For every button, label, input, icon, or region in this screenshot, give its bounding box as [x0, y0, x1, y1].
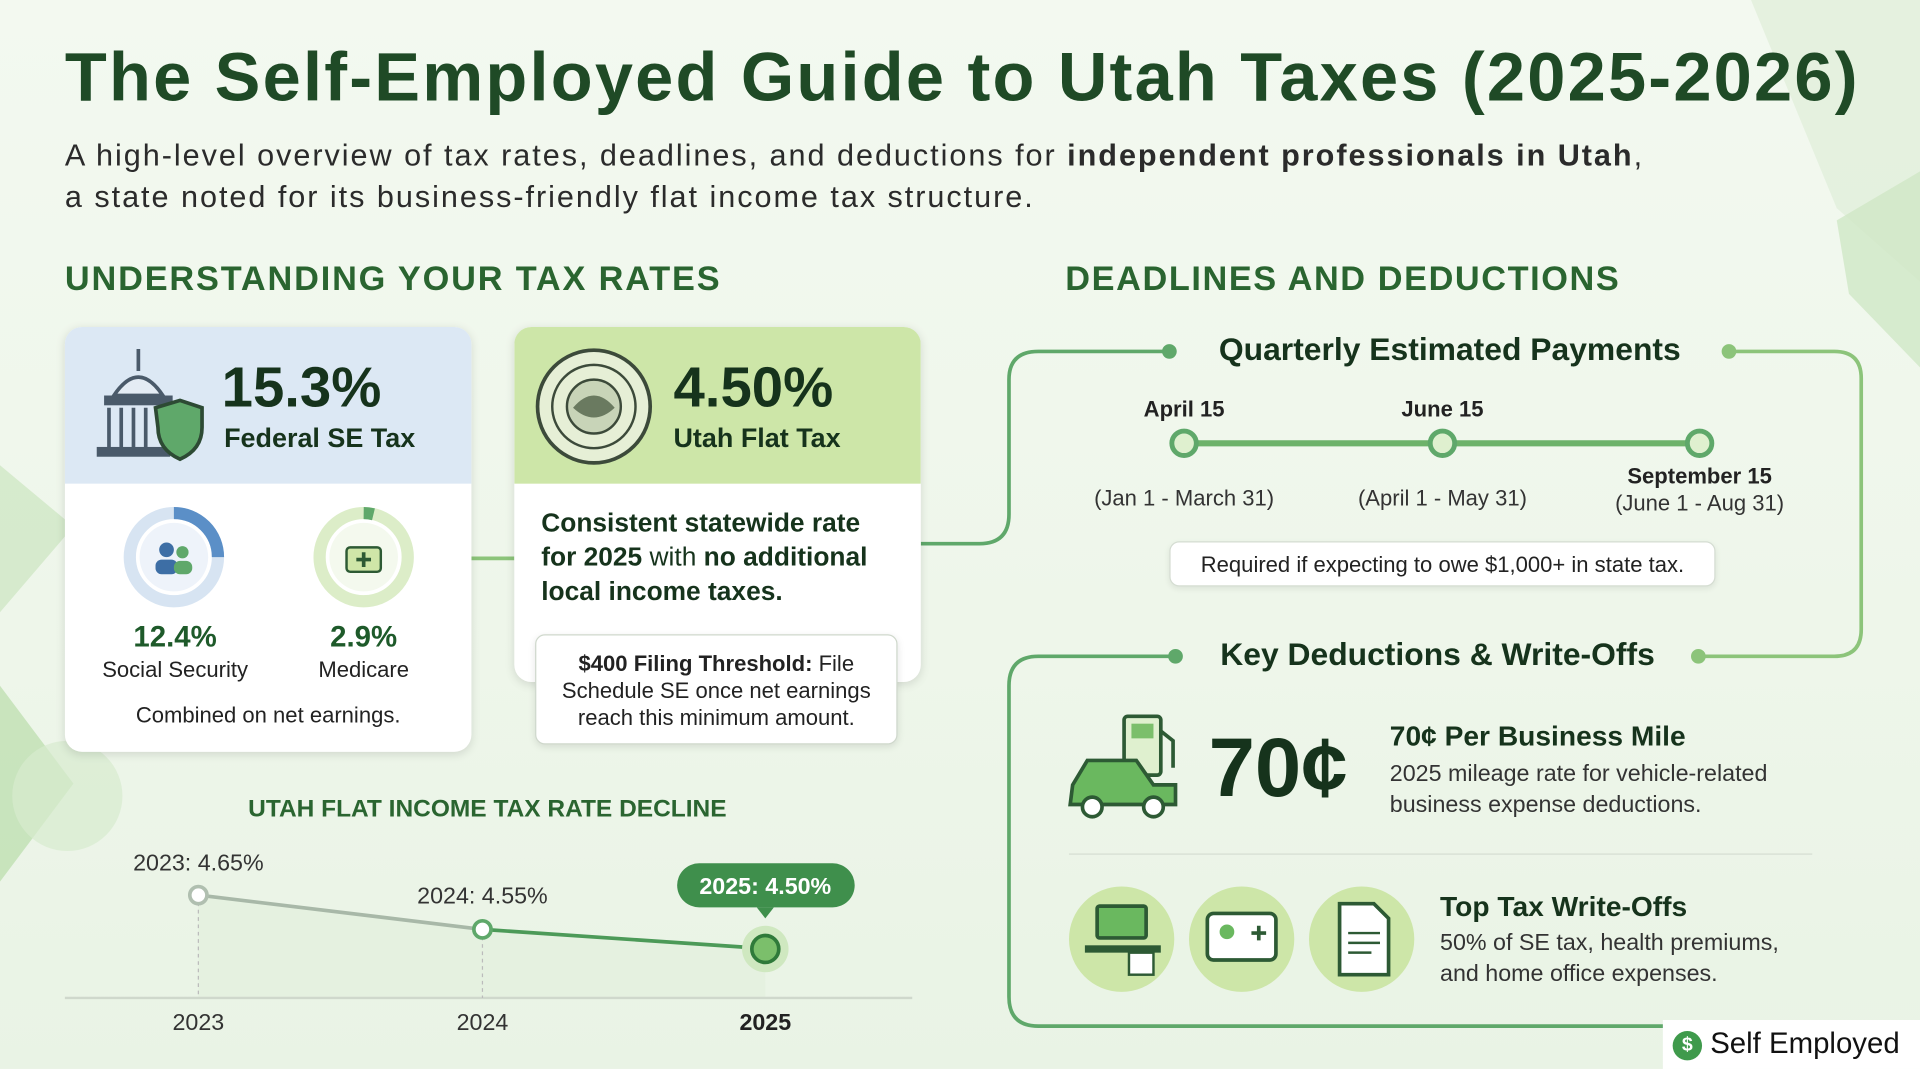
donut: social security: [124, 507, 224, 608]
logo: Self Employed: [1710, 1027, 1900, 1060]
line chart: [65, 850, 912, 1035]
timeline: (Jan 1 - March 31): [1094, 486, 1274, 511]
note: requirement: Required if expecting to owe $1,000+ in state tax.: [1201, 552, 1684, 577]
timeline: September 15: [1627, 464, 1772, 489]
panel: federal SE tax: Medicare: [318, 658, 409, 682]
callout: filing threshold: $400 Filing Threshold: File: [579, 651, 854, 676]
timeline: (April 1 - May 31): [1358, 486, 1527, 511]
utah description: for 2025 with no additional: [541, 542, 867, 572]
heading: deductions: Key Deductions & Write-Offs: [1220, 636, 1655, 672]
timeline: June 15: [1401, 396, 1483, 421]
logo: $: [1682, 1035, 1693, 1056]
panel: federal SE tax: Social Security: [102, 658, 248, 682]
panel: utah flat tax: 4.50%: [673, 355, 833, 419]
utah description: [541, 508, 867, 606]
utah description: Consistent statewide rate: [541, 508, 860, 538]
icon: state seal: [536, 348, 652, 465]
icon: car and gas pump: [1068, 714, 1178, 819]
note: requirement: [1169, 541, 1716, 587]
line chart: 2023: [173, 1009, 224, 1035]
text: 50% of SE tax, health premiums,: [1440, 931, 1779, 956]
chart title: UTAH FLAT INCOME TAX RATE DECLINE: [248, 796, 727, 823]
callout: filing threshold: [535, 634, 898, 744]
logo: [1663, 1020, 1920, 1069]
callout: filing threshold: reach this minimum amount.: [578, 705, 855, 730]
heading: deadlines: DEADLINES AND DEDUCTIONS: [1065, 260, 1620, 298]
utah description: local income taxes.: [541, 577, 783, 606]
line chart: 2024: 4.55%: [417, 883, 548, 909]
panel: federal SE tax: Combined on net earnings.: [136, 703, 400, 727]
heading: quarterly payments: Quarterly Estimated Payments: [1219, 331, 1681, 367]
title: The Self-Employed Guide to Utah Taxes (2025-2026): [65, 38, 1860, 115]
mileage rate: 70¢: [1209, 721, 1348, 814]
heading: tax rates: UNDERSTANDING YOUR TAX RATES: [65, 260, 721, 298]
timeline: (June 1 - Aug 31): [1615, 491, 1784, 516]
text: 2025 mileage rate for vehicle-related: [1390, 762, 1767, 787]
donut: medicare: [314, 507, 414, 608]
text: top write-offs: Top Tax Write-Offs: [1440, 890, 1687, 922]
icon: capitol shield: [96, 349, 204, 462]
subtitle: A high-level overview of tax rates, deadlines, and deductions for independent professionals in Utah,: [65, 138, 1644, 173]
text: business expense deductions.: [1390, 792, 1702, 818]
federal rate: 15.3%: [222, 355, 381, 419]
icons: write-offs: [1069, 886, 1414, 992]
panel: federal SE tax: 2.9%: [330, 621, 397, 654]
panel: federal SE tax: [65, 327, 471, 752]
panel: utah flat tax: [514, 327, 921, 682]
timeline: April 15: [1144, 396, 1224, 421]
text: 70¢ Per Business Mile: [1390, 720, 1686, 752]
line chart: 2023: 4.65%: [133, 850, 264, 876]
text: and home office expenses.: [1440, 961, 1718, 987]
timeline: [1094, 396, 1784, 516]
panel: federal SE tax: 12.4%: [133, 621, 217, 654]
panel: utah flat tax: Utah Flat Tax: [673, 422, 841, 453]
federal header: [65, 327, 471, 484]
subtitle: a state noted for its business-friendly flat income tax structure.: [65, 180, 1035, 214]
federal header: Federal SE Tax: [224, 422, 415, 453]
subtitle: [65, 138, 1644, 214]
line chart: 2025: [739, 1009, 791, 1035]
line chart: 2024: [457, 1009, 508, 1035]
line chart: 2025: 4.50%: [699, 873, 832, 899]
callout: filing threshold: Schedule SE once net earnings: [562, 678, 871, 703]
